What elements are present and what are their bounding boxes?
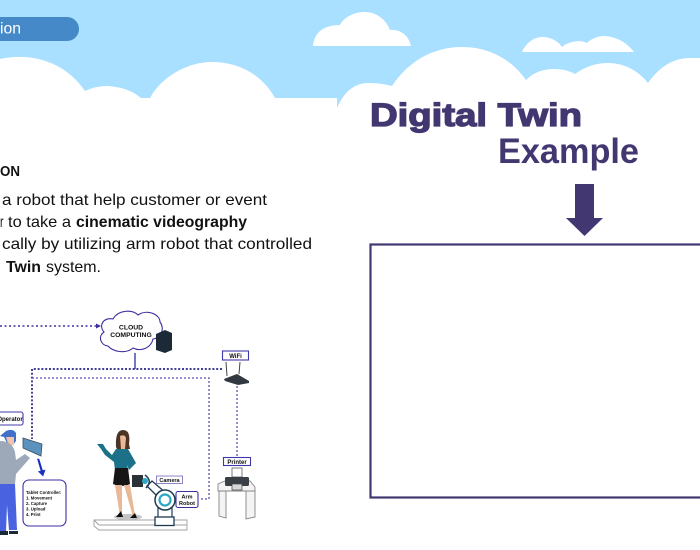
section pill: ion	[0, 20, 21, 38]
tablet controller list: 2. Capture	[26, 501, 48, 506]
icon: server	[156, 330, 172, 353]
description text block: to take a	[8, 214, 71, 231]
icon: tablet	[23, 438, 42, 456]
wifi label: WiFi	[229, 354, 242, 360]
tablet controller list: 4. Print	[26, 512, 41, 517]
empty example frame	[370, 244, 700, 498]
small cloud: upper right	[522, 36, 634, 52]
illustration: operator	[0, 430, 30, 535]
camera label	[156, 476, 182, 484]
icon: printer	[225, 468, 249, 490]
tablet controller list: Tablet Controller:	[26, 490, 62, 495]
printer label	[224, 458, 250, 466]
cloud computing	[101, 311, 162, 352]
small cloud: upper middle	[313, 12, 411, 46]
description text block: cinematic videography	[76, 214, 247, 231]
sky background with cloud horizon	[0, 0, 700, 140]
tablet controller list: 1. Movement	[26, 496, 53, 500]
description text block: system.	[46, 259, 101, 276]
illustration: arm robot	[132, 475, 175, 526]
tablet controller list	[23, 480, 66, 526]
cloud computing: CLOUD	[119, 324, 143, 332]
cloud computing: COMPUTING	[110, 332, 152, 339]
tablet controller list: 3. Upload	[26, 506, 46, 512]
arm robot label: Robot	[179, 501, 195, 507]
arrow: down to example box	[566, 184, 603, 236]
section pill	[0, 17, 79, 41]
description text block: cally by utilizing arm robot that controlled	[2, 236, 312, 253]
icon: table	[218, 481, 255, 519]
description text block: a robot that help customer or event	[2, 192, 268, 209]
arm robot label	[176, 492, 198, 508]
printer label: Printer	[227, 460, 247, 466]
description text block: ON	[0, 164, 20, 180]
arrow: tablet to controller list	[38, 459, 45, 476]
heading: Example: Example	[498, 132, 639, 171]
description text block: r	[0, 214, 4, 231]
camera label: Camera	[159, 478, 181, 484]
description text block	[0, 164, 312, 276]
platform	[94, 520, 187, 530]
arm robot label: Arm	[181, 494, 193, 500]
icon: router	[224, 362, 249, 385]
connector lines	[0, 324, 237, 499]
operator label	[0, 412, 23, 425]
wifi label	[222, 351, 248, 360]
description text block: Twin	[6, 259, 41, 276]
system diagram	[0, 311, 255, 535]
illustration: presenter woman	[97, 430, 142, 520]
heading: Digital Twin: Digital Twin	[370, 97, 582, 133]
